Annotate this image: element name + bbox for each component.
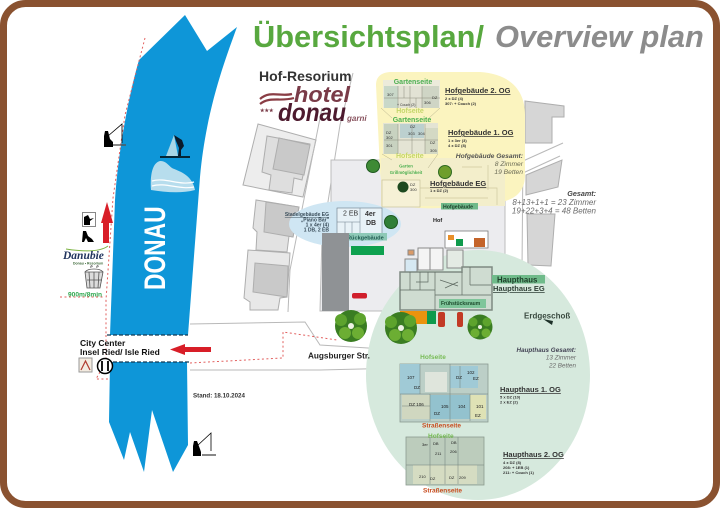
interior rooms xyxy=(400,267,491,310)
floor plan: Hofgebäude 1. OG: 301 xyxy=(386,143,393,148)
floor plan: Hofgebäude 1. OG xyxy=(382,117,438,168)
floor plan: Hofgebäude EG: DZ xyxy=(410,182,416,187)
roads and street outlines xyxy=(190,73,563,370)
floor plan: Haupthaus 2. OG: DB xyxy=(451,440,457,445)
floor plan: Haupthaus 2. OG: DZ xyxy=(449,475,455,480)
heading: Hofgebäude 2. OG: Hofgebäude 2. OG xyxy=(445,86,511,95)
overall totals: Gesamt: xyxy=(567,189,597,198)
annex: breakfast room outbuilding xyxy=(445,231,488,248)
heading: Hofgebäude 2. OG xyxy=(445,86,511,106)
heading: Hofgebäude 2. OG: 307: + Couch (2) xyxy=(445,101,477,106)
title: Overview plan xyxy=(495,19,704,54)
label: Straßenseite 1: Straßenseite xyxy=(422,422,461,430)
floor plan: Haupthaus 2. OG: 211 xyxy=(435,451,442,456)
totals: Haupthaus Gesamt xyxy=(517,347,577,370)
tree: upper-left garden xyxy=(366,160,380,172)
floor plan: Hofgebäude 1. OG: 304 xyxy=(418,131,425,136)
floor plan: Hofgebäude 1. OG: Hofseite xyxy=(396,153,424,160)
floor plan: Haupthaus 2. OG: 210 xyxy=(419,474,426,479)
floor plan: Haupthaus 1. OG: 105 xyxy=(441,404,449,409)
floor plan: Hofgebäude 1. OG: 303 xyxy=(408,131,415,136)
tree 1 xyxy=(335,310,367,342)
city center label: City Center xyxy=(80,338,126,348)
totals: Hofgebäude Gesamt xyxy=(456,153,524,176)
overall totals: 19+22+3+4 = 48 Betten xyxy=(512,206,597,216)
floor plan: Haupthaus 2. OG: 209 xyxy=(459,475,466,480)
zone: Hofgebäude yard xyxy=(381,158,505,206)
floor plan: Hofgebäude 2. OG: Hofseite xyxy=(396,108,424,115)
floor plan: Haupthaus 1. OG: EZ xyxy=(473,376,479,381)
icon: hunting sign xyxy=(82,212,96,226)
floor plan: Hofgebäude 2. OG: 307 xyxy=(387,92,394,97)
label: Erdgeschoß: Erdgeschoß xyxy=(524,312,570,320)
floor plan: Hofgebäude EG: Grillmöglichkeit xyxy=(390,170,423,175)
floor plan: Hofgebäude 1. OG: DZ xyxy=(386,130,392,135)
hotel logo: garni xyxy=(346,114,367,123)
floor plan: Hofgebäude 1. OG: 305 xyxy=(430,148,437,153)
city center label: Insel Ried/ Isle Ried xyxy=(80,347,160,357)
tag: Frühstücksraum: Frühstücksraum xyxy=(441,301,481,307)
date note: Stand: 18.10.2024 xyxy=(193,392,245,400)
totals: Hofgebäude Gesamt: 19 Betten xyxy=(494,169,523,176)
terrace orange xyxy=(400,311,427,324)
floor plan: Haupthaus 1. OG: DZ xyxy=(434,411,440,416)
icon: restaurant xyxy=(98,358,112,374)
floor plan: Hofgebäude EG: 300 xyxy=(410,187,417,192)
overall totals xyxy=(512,189,597,216)
heading: Haupthaus 2. OG: 4 x DZ (8) xyxy=(503,460,522,465)
text: Stadelgebäude: Stadelgebäude EG xyxy=(285,212,329,218)
floor plan: Haupthaus 2. OG: 3er xyxy=(422,442,428,447)
icon: person with bag xyxy=(82,231,94,242)
floor plan: Haupthaus 1. OG: 107 xyxy=(407,375,415,380)
zone: Haupthaus green highlight xyxy=(366,250,590,500)
city center label xyxy=(80,338,160,357)
heading: Hofgebäude 1. OG: 1 x 3er (3) xyxy=(448,138,467,143)
floor plan: Hofgebäude 2. OG: Gartenseite xyxy=(394,79,432,86)
icon: angler upper xyxy=(104,124,126,147)
heading: Hofgebäude EG xyxy=(430,179,486,193)
icon: paddle boarder on wave xyxy=(151,135,195,192)
heading: Haupthaus 1. OG xyxy=(500,385,561,404)
totals: Hofgebäude Gesamt: 8 Zimmer xyxy=(495,161,524,168)
label: Straßenseite 2: Straßenseite xyxy=(423,488,462,494)
floor plan: Hofgebäude 2. OG: 306 xyxy=(424,100,431,105)
river label: DONAU xyxy=(138,206,172,290)
hotel logo: Hof-Resorium xyxy=(259,68,352,84)
floor plan: Haupthaus 2. OG: Hofseite xyxy=(428,433,454,440)
icon: hot tub xyxy=(85,266,103,288)
heading: Haupthaus 2. OG: 211: + Couch (1) xyxy=(503,470,534,475)
floor plan: Haupthaus 1. OG: EZ xyxy=(475,413,481,418)
distance label: 900m/8min xyxy=(68,292,102,298)
heading: Haupthaus 1. OG: Haupthaus 1. OG xyxy=(500,385,561,394)
floor plan: Haupthaus 1. OG: 102 xyxy=(467,370,475,375)
floor plan: Haupthaus 1. OG: DZ 106 xyxy=(409,402,424,407)
zone: Hofgebäude yellow highlight xyxy=(376,72,525,208)
hotel logo xyxy=(259,68,367,127)
totals: Haupthaus Gesamt: 22 Betten xyxy=(548,362,576,370)
green marker: parking xyxy=(351,246,384,255)
dotted walking path xyxy=(60,38,337,379)
floor plan: Rückgebäude xyxy=(337,208,382,234)
arrow: red up arrow xyxy=(101,202,113,243)
floor plan: Hofgebäude 1. OG: 302 xyxy=(386,135,393,140)
logo: Danubie: Danubie xyxy=(62,250,104,262)
heading: Haupthaus 2. OG: Haupthaus 2. OG xyxy=(503,450,564,459)
icon: angler lower xyxy=(193,433,216,456)
tree: garden xyxy=(438,166,452,178)
section: Rückgebäude xyxy=(285,208,387,242)
logo: Danubie: Donau • Resorium xyxy=(73,262,103,266)
floor plan: Hofgebäude 2. OG: DZ xyxy=(432,95,438,100)
tree 3 xyxy=(468,314,492,340)
hotel logo: hotel xyxy=(294,82,351,107)
label: Erdgeschoß xyxy=(524,312,570,325)
heading: Hofgebäude 1. OG xyxy=(448,128,514,148)
heading: Haupthaus 2. OG: 208: + 1EB (1) xyxy=(503,465,530,470)
icon: sight pictogram xyxy=(79,358,92,372)
floor plan: Hofgebäude EG: Garten xyxy=(399,164,413,168)
building outline xyxy=(400,267,492,310)
label: Hof: Hof xyxy=(433,218,442,224)
overall totals: 8+13+1+1 = 23 Zimmer xyxy=(512,198,596,207)
tag: Hofgebäude: Hofgebäude xyxy=(443,204,473,210)
floor plan: Haupthaus 1. OG: DZ xyxy=(456,375,462,380)
small outbuildings xyxy=(405,248,463,272)
green entrance xyxy=(427,311,436,324)
red car right xyxy=(457,312,463,327)
river Donau xyxy=(109,15,237,472)
floor plan: Haupthaus 1. OG: 101 xyxy=(476,404,484,409)
tag: Rückgebäude: Rückgebäude xyxy=(347,236,384,242)
tree 2 xyxy=(385,312,417,344)
hotel logo: donau xyxy=(278,99,346,127)
trees along street xyxy=(335,310,492,344)
hotel logo: ★★★ xyxy=(260,108,274,114)
floor plan: Haupthaus 2. OG xyxy=(406,433,484,485)
title: Übersichtsplan/ xyxy=(253,19,484,54)
heading: Hofgebäude 1. OG: 4 x DZ (8) xyxy=(448,143,467,148)
floor plan: Rückgebäude: 4er xyxy=(365,211,376,218)
floor plan: Hofgebäude EG xyxy=(382,164,497,207)
floor plan: Hofgebäude 1. OG: DZ xyxy=(410,124,416,129)
totals: Hofgebäude Gesamt: Hofgebäude Gesamt: xyxy=(456,153,523,160)
totals: Haupthaus Gesamt: 13 Zimmer xyxy=(546,354,577,362)
floor plan: Haupthaus 1. OG: Hofseite xyxy=(420,354,446,361)
parking building grey xyxy=(322,233,349,311)
title xyxy=(253,19,704,54)
Haupthaus ground floor plan xyxy=(400,231,492,327)
tag: Hofgebäude xyxy=(441,203,478,210)
floor plan: Hofgebäude 1. OG: DZ xyxy=(430,140,436,145)
tag: Haupthaus: Haupthaus xyxy=(497,276,538,284)
neighbouring buildings xyxy=(243,101,564,310)
floor plan: Haupthaus 2. OG: 206 xyxy=(450,449,457,454)
tree: near Rückgebäude xyxy=(384,216,398,228)
heading: Haupthaus 2. OG xyxy=(503,450,564,475)
heading: Hofgebäude 2. OG: 2 x DZ (4) xyxy=(445,96,464,101)
floor plan: Haupthaus 2. OG: DB xyxy=(433,441,439,446)
floor plan: Rückgebäude: DB xyxy=(366,220,376,227)
floor plan: Rückgebäude: 2 EB xyxy=(343,210,359,218)
heading: Hofgebäude 1. OG: Hofgebäude 1. OG xyxy=(448,128,514,137)
totals: Haupthaus Gesamt: Haupthaus Gesamt: xyxy=(517,347,576,354)
arrow: red left arrow xyxy=(170,344,211,355)
floor plan: Haupthaus 2. OG: DZ xyxy=(430,476,436,481)
floor plan: Haupthaus 1. OG xyxy=(400,354,488,422)
street label: Augsburger Str. xyxy=(308,352,370,360)
red car xyxy=(352,293,367,298)
heading: Haupthaus EG: Haupthaus EG xyxy=(493,284,545,293)
site courtyard xyxy=(320,160,505,311)
red car left xyxy=(438,312,445,327)
floor plan: Hofgebäude 2. OG: + Couch (2) xyxy=(397,103,415,107)
zone: Rückgebäude blue highlight xyxy=(289,201,401,247)
heading: Haupthaus 1. OG: 2 x EZ (2) xyxy=(500,400,518,404)
text: Stadelgebäude xyxy=(285,212,330,234)
floor plan: Hofgebäude 1. OG: Gartenseite xyxy=(393,117,431,124)
text: Stadelgebäude: 1 x 4er (4) xyxy=(306,222,329,228)
logo: Danubie xyxy=(62,246,108,266)
text: Stadelgebäude: 1 DB, 2 EB xyxy=(304,228,329,234)
floor plan: Haupthaus 1. OG: 104 xyxy=(458,404,466,409)
text: Stadelgebäude: „Piano Bar" xyxy=(301,218,330,224)
floor plan: Haupthaus 1. OG: DZ xyxy=(414,385,420,390)
floor plan: Hofgebäude 2. OG xyxy=(381,79,440,118)
heading: Hofgebäude EG: 1 x DZ (2) xyxy=(430,188,449,193)
heading: Haupthaus 1. OG: 5 x DZ (10) xyxy=(500,394,521,400)
heading: Hofgebäude EG: Hofgebäude EG xyxy=(430,179,486,188)
dashed river crossing lines xyxy=(107,335,190,362)
section: Hofgebäude xyxy=(381,79,524,210)
